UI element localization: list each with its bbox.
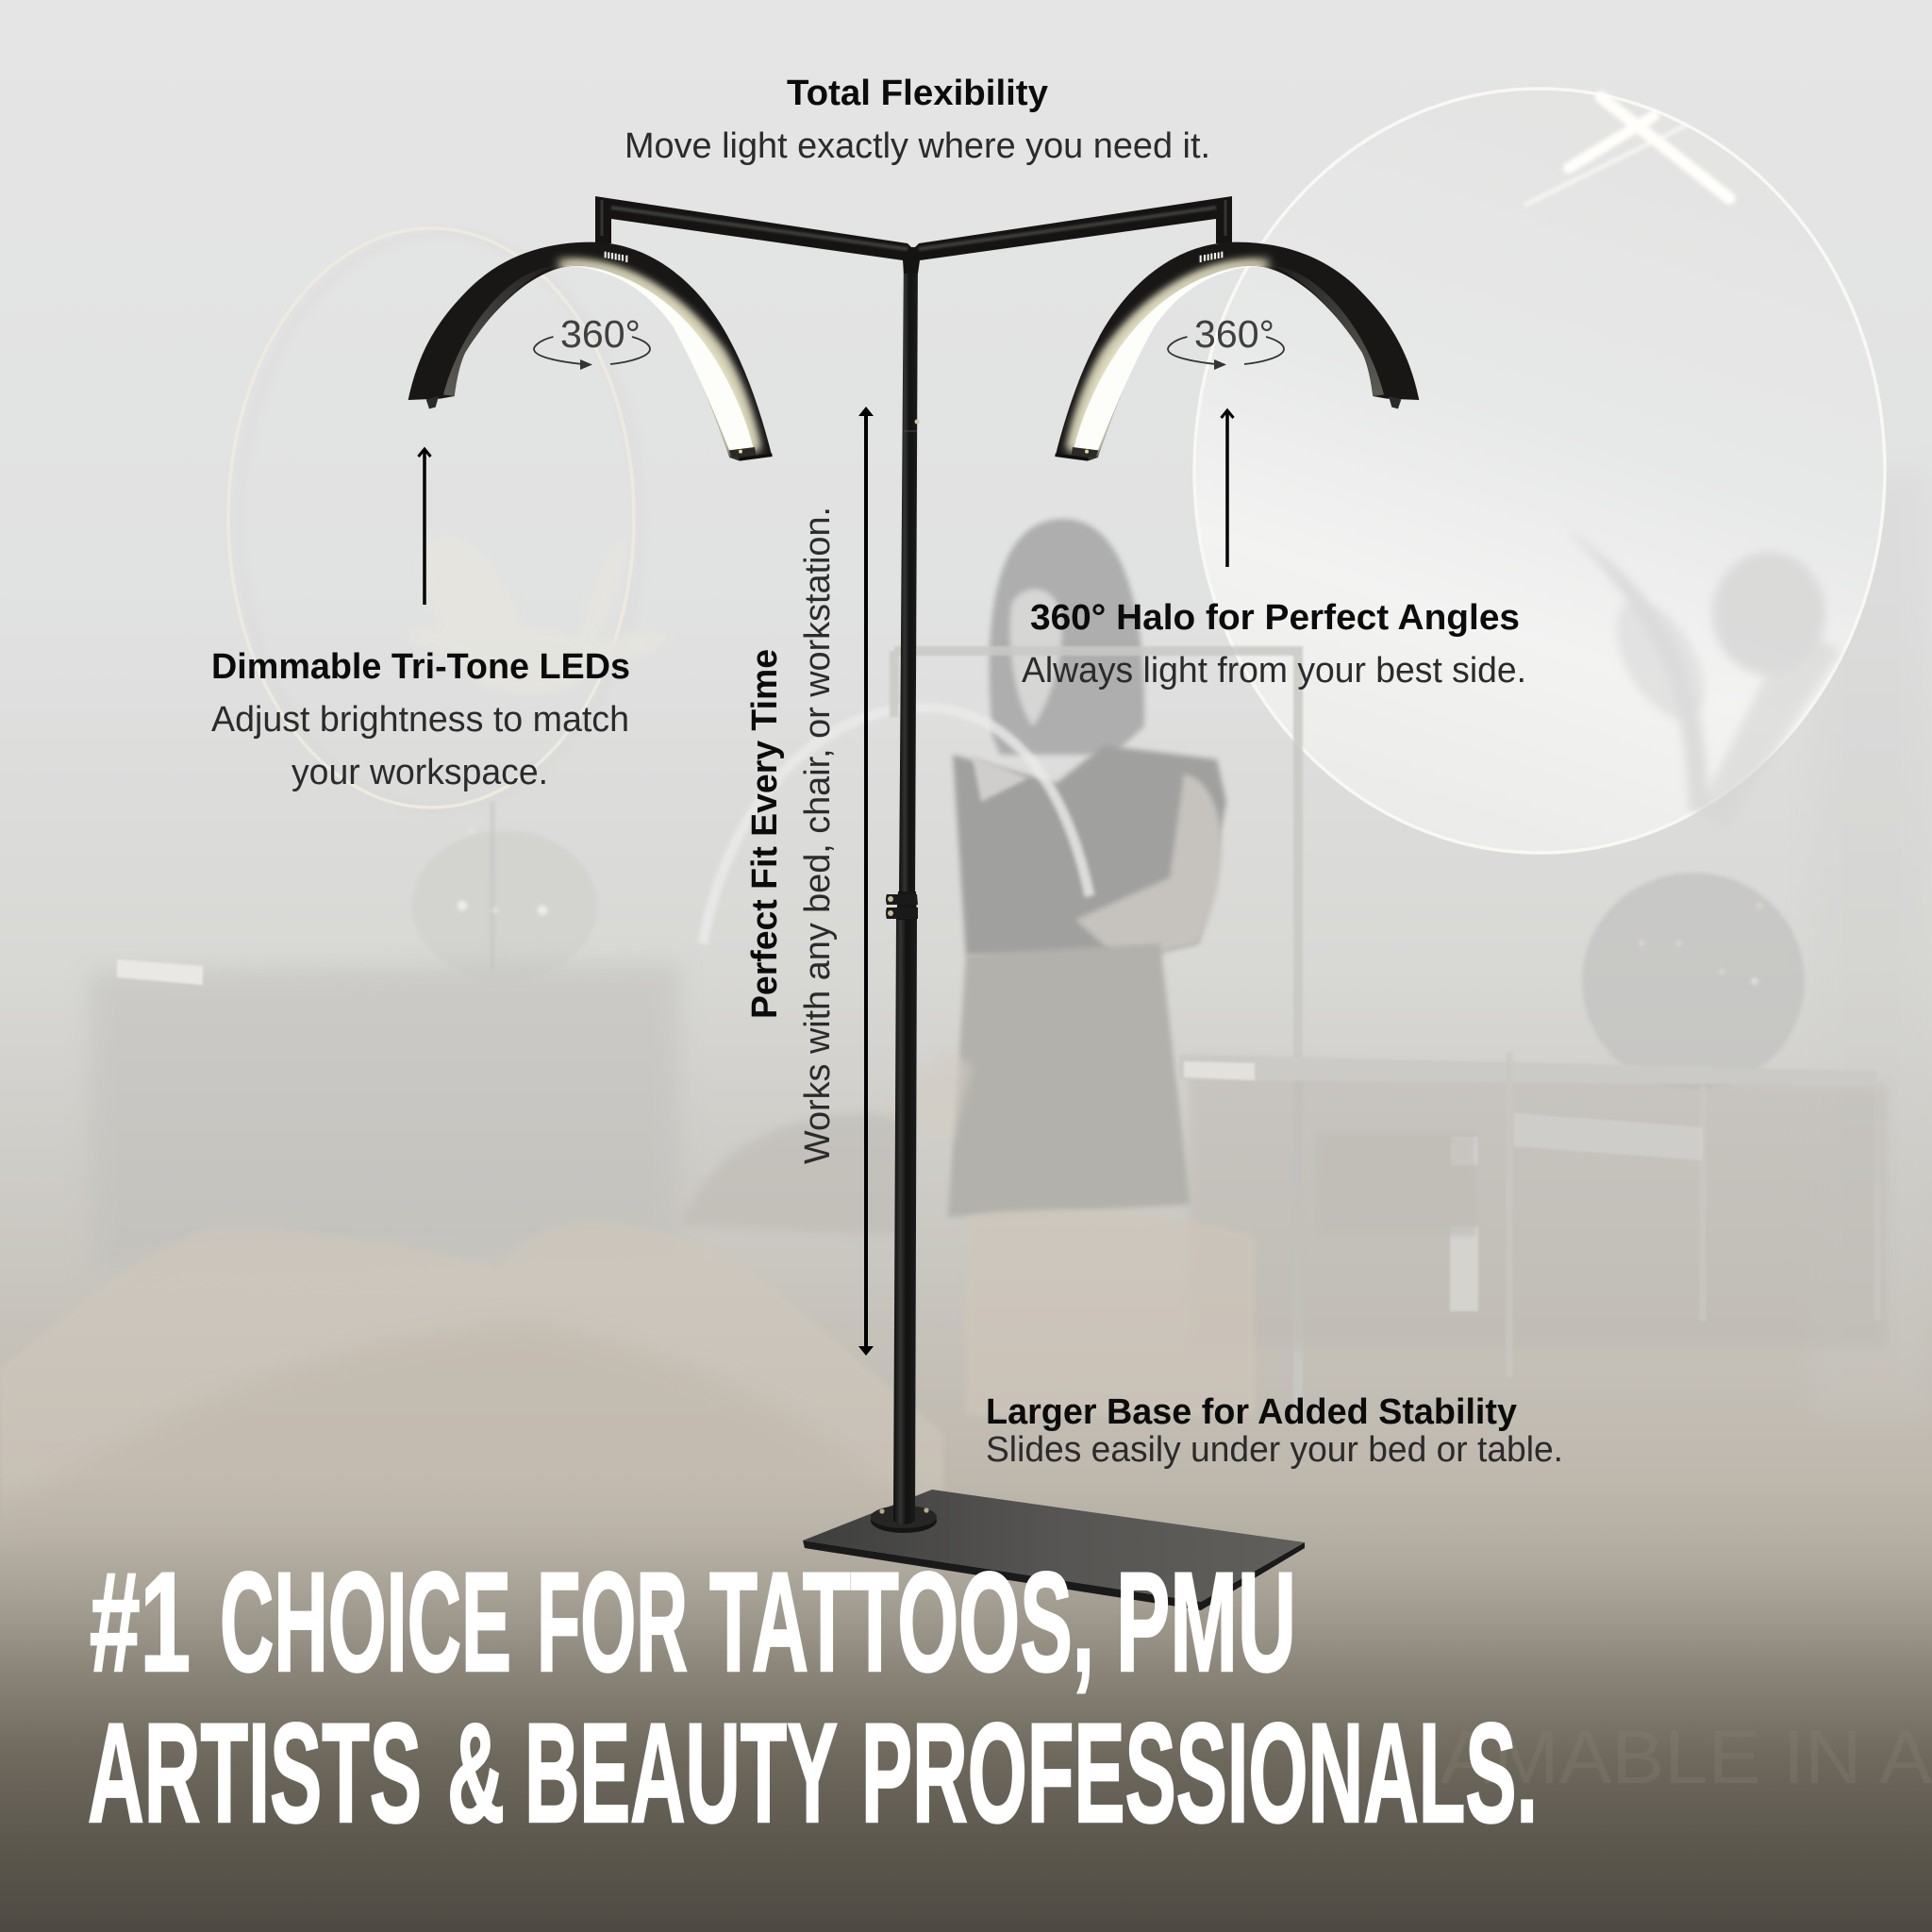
icon: left 360 degree rotation: 360°: [560, 312, 641, 356]
headline: ARTISTS: [88, 1693, 422, 1852]
T crossbar: [595, 196, 1232, 274]
right vase: [1582, 873, 1805, 1090]
bottom dark fade: [0, 1472, 1932, 1932]
left pampas plant: [401, 520, 672, 693]
headline: TATTOOS,: [709, 1542, 1094, 1701]
wall shading on far right: [1811, 472, 1932, 1415]
arrow: up to left halo: [419, 449, 430, 605]
callout: dimmable LEDs: your workspace.: [291, 753, 548, 792]
round mirror: [1194, 89, 1885, 853]
pole clamp: [886, 894, 918, 919]
headline: #1: [90, 1542, 191, 1701]
client lying on bed: [0, 1047, 1255, 1604]
faint background caption: AMABLE IN A: [1441, 1715, 1932, 1799]
headline: CHOICE: [220, 1542, 511, 1701]
left halo light: [408, 242, 773, 461]
arrow: up to right halo: [1221, 410, 1234, 567]
headline: PMU: [1116, 1542, 1296, 1701]
ring light behind woman: [703, 708, 1090, 943]
headline: FOR: [537, 1542, 688, 1701]
callout: total flexibility: Move light exactly where you need it.: [625, 126, 1210, 166]
arrow: pole height double arrow: [858, 407, 874, 1356]
callout: perfect fit, rotated: Perfect Fit Every Time: [745, 649, 785, 1019]
icon: right 360 degree rotation: 360°: [1194, 312, 1274, 356]
headline: BEAUTY: [525, 1693, 838, 1852]
headline: [88, 1542, 1538, 1852]
callout: 360 halo: 360° Halo for Perfect Angles: [1030, 598, 1520, 638]
callout: 360 halo: Always light from your best side.: [1022, 651, 1526, 691]
right halo light: [1055, 242, 1419, 461]
headline: &: [447, 1693, 505, 1852]
callout: dimmable LEDs: [211, 647, 630, 792]
callout: perfect fit, rotated: [745, 507, 838, 1164]
callout: larger base: [986, 1392, 1563, 1470]
left ring light: [228, 228, 641, 808]
callout: total flexibility: [625, 74, 1210, 166]
callout: larger base: Slides easily under your bed or table.: [986, 1430, 1563, 1470]
callout: dimmable LEDs: Dimmable Tri-Tone LEDs: [211, 647, 630, 687]
callout: perfect fit, rotated: Works with any bed, chair, or workstation.: [798, 507, 838, 1164]
product: double halo floor lamp: [408, 196, 1419, 1610]
callout: 360 halo: [1022, 598, 1526, 691]
lamp base plate: [803, 1490, 1305, 1610]
callout: dimmable LEDs: Adjust brightness to match: [211, 700, 629, 740]
callout: total flexibility: Total Flexibility: [787, 74, 1048, 113]
right sideboard: [1179, 1052, 1887, 1377]
callout: larger base: Larger Base for Added Stability: [986, 1392, 1517, 1432]
left sideboard: [90, 959, 679, 1274]
icon: left 360 degree rotation: [534, 312, 650, 370]
icon: right 360 degree rotation: [1168, 312, 1284, 370]
light stand frame: [894, 651, 1298, 1415]
right pampas plant: [1566, 528, 1840, 830]
woman at ring light: [948, 519, 1226, 1217]
pole: [893, 247, 919, 1524]
left vase: [412, 802, 597, 981]
